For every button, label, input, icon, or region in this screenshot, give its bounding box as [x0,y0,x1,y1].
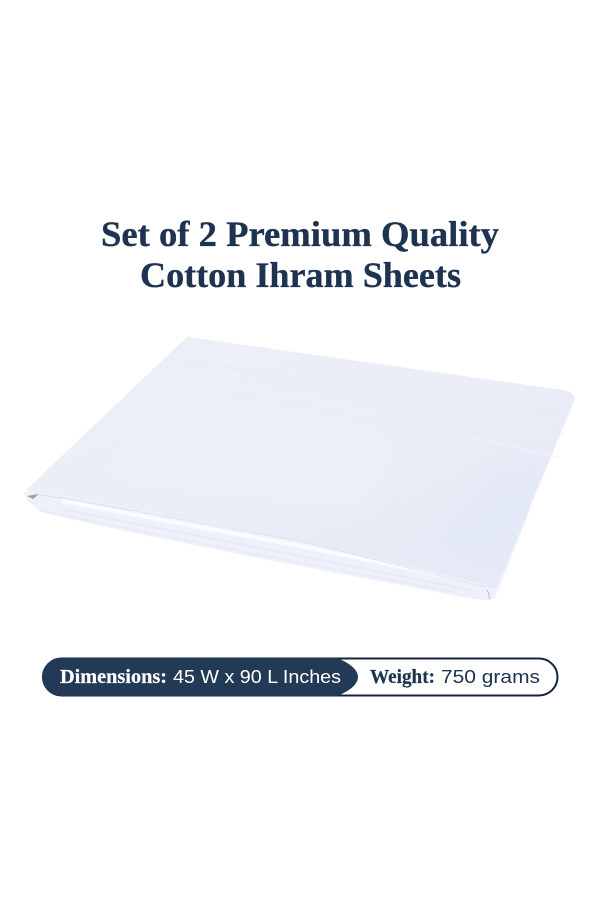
pill: white outline segment [43,658,558,696]
sheet: inner pocket edge [40,495,486,587]
sheet: right corner crease [487,590,489,599]
title [101,214,499,295]
sheet: hem band crease [153,359,560,457]
weight text: Weight: [370,666,435,688]
weight text: 750 grams [441,666,540,687]
title: Cotton Ihram Sheets [140,255,461,295]
folded white cotton sheet [24,337,575,600]
specification pill [42,658,558,696]
sheet: top surface [26,337,575,588]
dimensions text: Dimensions: [60,666,167,688]
title: Set of 2 Premium Quality [101,214,499,254]
sheet: left fold opening [27,494,39,499]
weight text [370,666,540,688]
sheet: soft shading on top surface [110,400,560,570]
dimensions text [60,666,341,688]
pill: dark dimensions segment [42,658,358,696]
dimensions text: 45 W x 90 L Inches [173,666,341,687]
sheet: lower folded layers [24,480,530,600]
sheet: fold lines [42,501,480,592]
